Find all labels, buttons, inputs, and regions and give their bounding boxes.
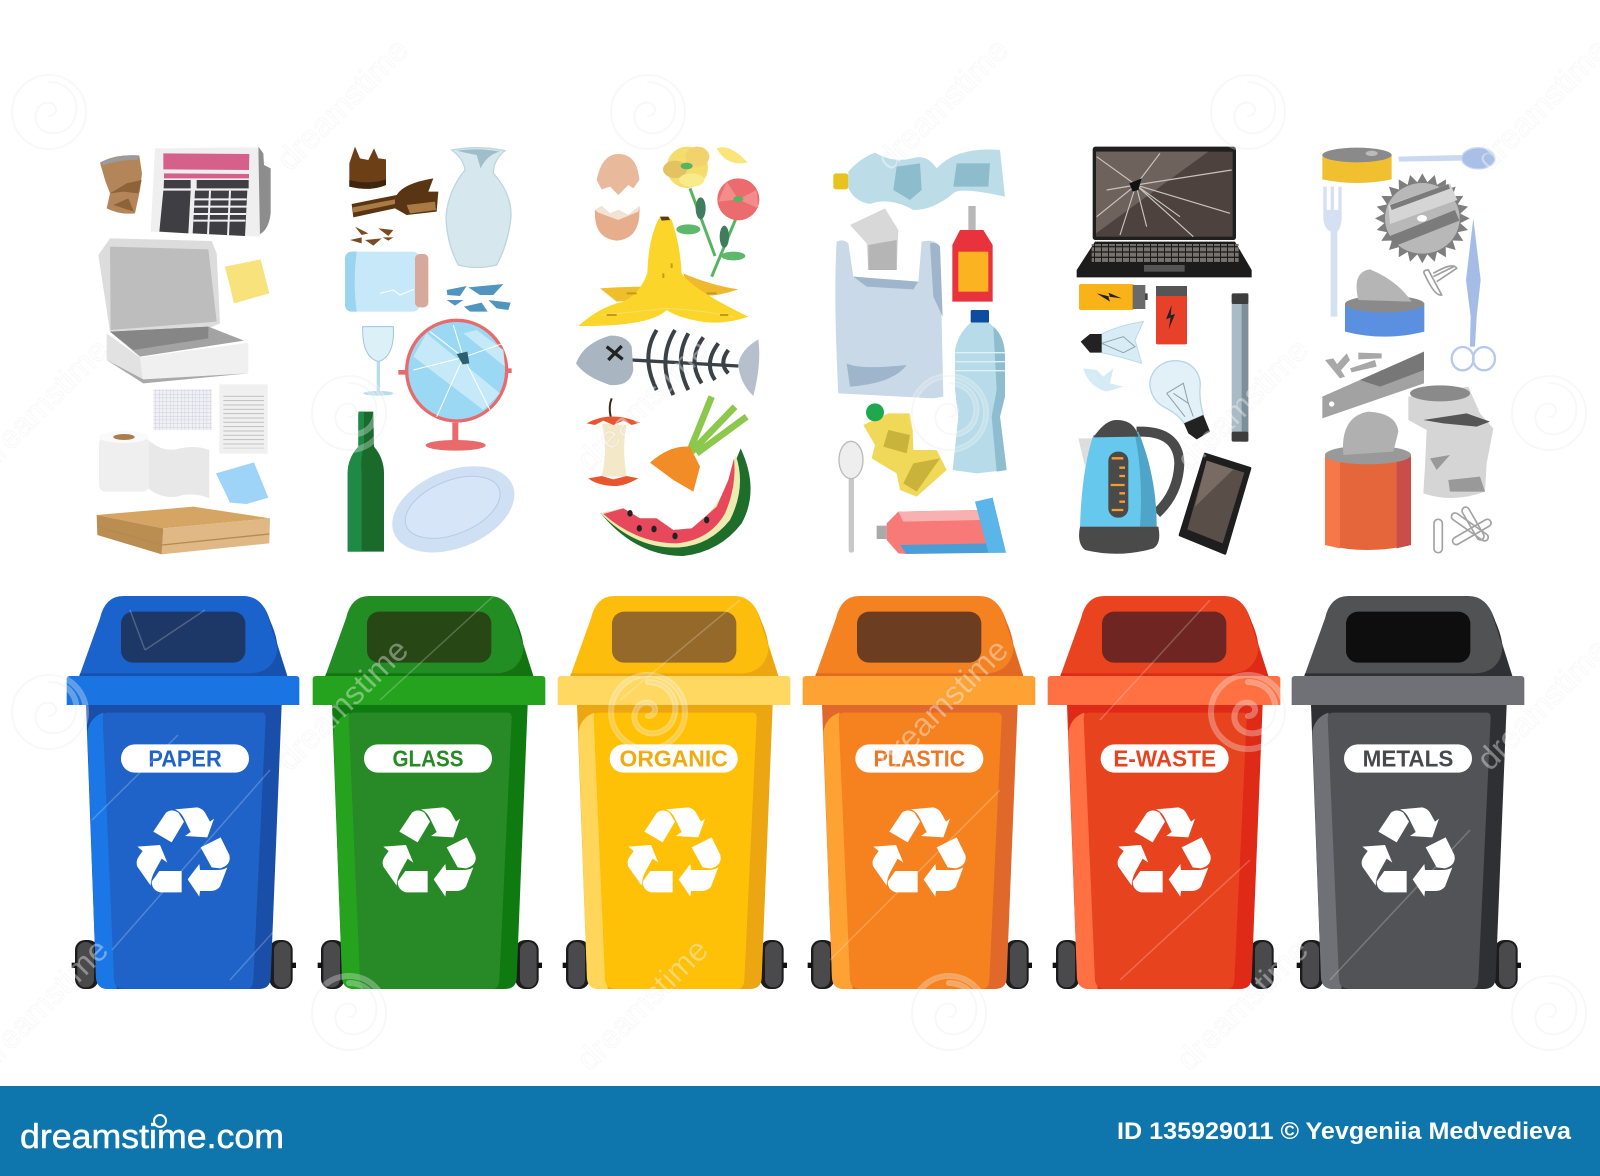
icon: recycle e-waste — [1118, 807, 1211, 897]
item: yellow sticky note — [225, 259, 269, 303]
item: crumpled plastic cup — [850, 208, 898, 270]
item: lined paper — [219, 384, 268, 454]
watermark: diagonal wordmarks: dreamstime — [269, 631, 415, 777]
item: glass vase — [446, 148, 511, 267]
item: squeezed tube — [877, 498, 1007, 554]
item: crushed can — [1408, 385, 1493, 498]
grid lines — [153, 389, 212, 430]
icon: recycle organic — [628, 807, 721, 897]
item: scissors — [1452, 218, 1495, 370]
item: broken mirror — [398, 320, 512, 451]
item: apple core — [587, 398, 640, 486]
watermark: diagonal wordmarks: dreamstime — [269, 31, 415, 177]
watermark: diagonal wordmarks: dreamstime — [1169, 931, 1315, 1077]
item: paper clips — [1434, 506, 1492, 553]
label pill: plastic — [855, 744, 983, 773]
item: broken bottle neck — [352, 178, 438, 217]
panel: glass waste items — [345, 147, 527, 569]
label pill: plastic: PLASTIC — [873, 746, 965, 772]
watermark: thin diagonal lines on bins — [92, 590, 1470, 980]
label pill: e-waste: E-WASTE — [1113, 746, 1216, 772]
item: brown shards — [350, 227, 393, 246]
item: fork — [1323, 187, 1342, 317]
item: flowers — [663, 147, 759, 277]
panel: e-waste items — [1077, 147, 1252, 554]
panel: organic waste items — [576, 147, 759, 556]
item: water bottle — [953, 310, 1007, 473]
icon: recycle plastic — [873, 807, 966, 897]
item: smartphone — [1180, 454, 1250, 553]
item: glass plate — [380, 450, 527, 569]
bin: plastic — [803, 596, 1035, 989]
watermark: diagonal wordmarks: dreamstime — [569, 331, 715, 477]
item: plastic spoon — [839, 441, 863, 553]
item: paper clip — [1424, 266, 1457, 295]
icon: recycle paper — [137, 807, 230, 897]
item: green bottle — [348, 412, 384, 552]
watermark: diagonal wordmarks: dreamstime — [869, 631, 1015, 777]
item: red tin can — [1325, 412, 1411, 550]
item: yellow tin can — [1322, 148, 1392, 183]
bin: e-waste — [1048, 596, 1280, 989]
item: cardboard box — [97, 507, 270, 554]
item: red battery — [1156, 286, 1187, 344]
ruled lines — [223, 393, 264, 448]
item: banana peel — [578, 217, 748, 326]
item: carrot — [650, 397, 747, 492]
item: light bulb — [1150, 361, 1210, 439]
item: plastic bag — [835, 240, 943, 398]
item: utility blade — [1322, 352, 1424, 418]
item: broken laptop — [1077, 147, 1252, 277]
item: crumpled paper cup — [100, 155, 142, 214]
item: blue shards — [447, 284, 511, 312]
item: yellow battery — [1079, 284, 1148, 310]
label pill: metals — [1344, 744, 1472, 773]
item: crushed plastic bottle — [833, 150, 1005, 210]
footer bar — [0, 1086, 1600, 1176]
item: red glue bottle — [952, 206, 993, 302]
label pill: organic: ORGANIC — [619, 746, 728, 772]
label pill: paper: PAPER — [148, 746, 222, 772]
item: blue tin can — [1345, 269, 1424, 337]
item: toilet paper roll — [99, 431, 209, 498]
item: blue sticky note — [216, 462, 268, 504]
icon: recycle glass — [383, 807, 476, 897]
item: broken brown bottle base — [349, 147, 386, 189]
bin: organic — [558, 596, 790, 989]
item: fluorescent tube — [1232, 293, 1248, 442]
bin: paper — [67, 596, 299, 989]
item: grid paper — [153, 389, 212, 430]
label pill: glass: GLASS — [392, 746, 463, 772]
item: watermelon rind — [601, 448, 751, 556]
icon: recycle metals — [1362, 807, 1455, 897]
item: broken light bulb — [1081, 322, 1143, 363]
item: newspaper — [151, 147, 271, 237]
panel: plastic waste items — [833, 150, 1007, 554]
item: eggshell — [595, 154, 640, 241]
item: crushed oil bottle — [863, 403, 947, 497]
label pill: paper — [121, 744, 249, 773]
item: metal spoon — [1398, 148, 1495, 169]
item: fish bones — [576, 330, 759, 396]
label pill: metals: METALS — [1363, 746, 1453, 772]
watermark: diagonal wordmarks: dreamstime — [569, 931, 715, 1077]
item: electric kettle — [1078, 420, 1179, 554]
footer logo: dreamstime.com: dreamstime.com — [20, 1118, 284, 1156]
bin: metals — [1292, 596, 1524, 989]
bin: glass — [313, 596, 545, 989]
item: screws — [1325, 353, 1382, 378]
item: wine glass — [363, 327, 393, 396]
item: saw blade — [1375, 173, 1470, 263]
watermark: diagonal wordmarks: dreamstime — [869, 31, 1015, 177]
watermark: diagonal wordmarks: dreamstime — [1169, 331, 1315, 477]
item: glass jar — [345, 252, 428, 312]
panel: paper waste items — [97, 147, 271, 554]
panel: metal waste items — [1322, 148, 1495, 553]
footer credit: ID 135929011 © Yevgeniia Medvedieva — [1117, 1118, 1572, 1145]
item: open grey box — [98, 238, 248, 383]
item: bulb shard — [1083, 368, 1123, 392]
label pill: glass — [364, 744, 492, 773]
